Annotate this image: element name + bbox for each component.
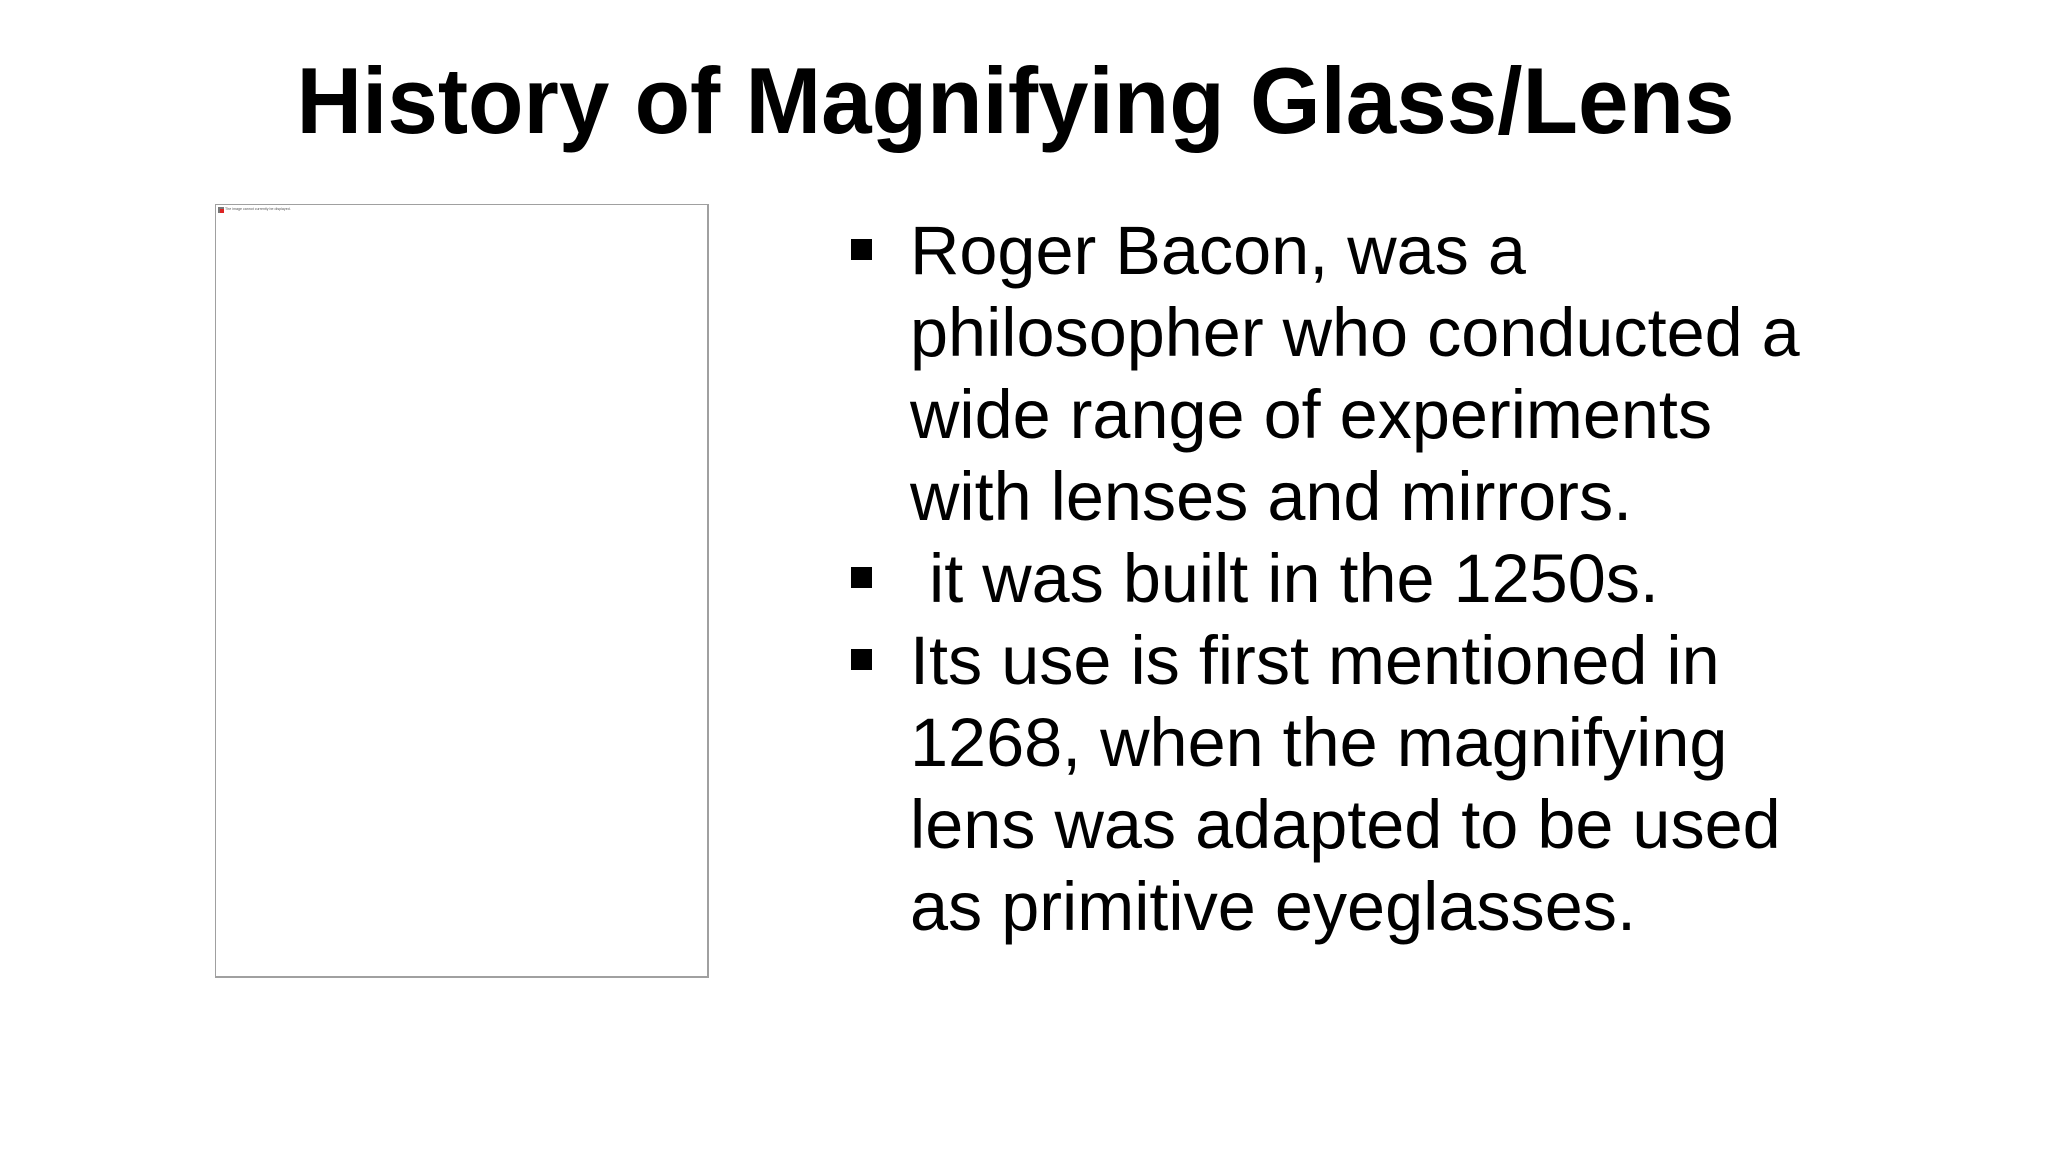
bullet marker 2 — [851, 567, 872, 588]
bullet 3 text: as primitive eyeglasses. — [910, 869, 1636, 945]
bullet 1 text: philosopher who conducted a — [910, 295, 1800, 371]
bullet 1 text: with lenses and mirrors. — [910, 459, 1632, 535]
bullet marker 1 — [851, 239, 872, 260]
bullet 3 text — [910, 623, 1781, 945]
bullet 3 text: Its use is first mentioned in — [910, 623, 1720, 699]
bullet list — [851, 213, 1800, 945]
bullet 1 text: wide range of experiments — [910, 377, 1712, 453]
bullet 1 text — [910, 213, 1800, 535]
icon: broken image — [218, 207, 224, 213]
broken image message: The image cannot currently be displayed. — [225, 207, 291, 211]
bullet 3 text: lens was adapted to be used — [910, 787, 1781, 863]
bullet marker 3 — [851, 649, 872, 670]
bullet 1 text: Roger Bacon, was a — [910, 213, 1526, 289]
bullet 2 text: it was built in the 1250s. — [929, 541, 1659, 617]
image placeholder frame — [215, 204, 709, 978]
bullet 3 text: 1268, when the magnifying — [910, 705, 1727, 781]
title: History of Magnifying Glass/Lens — [297, 48, 1734, 153]
